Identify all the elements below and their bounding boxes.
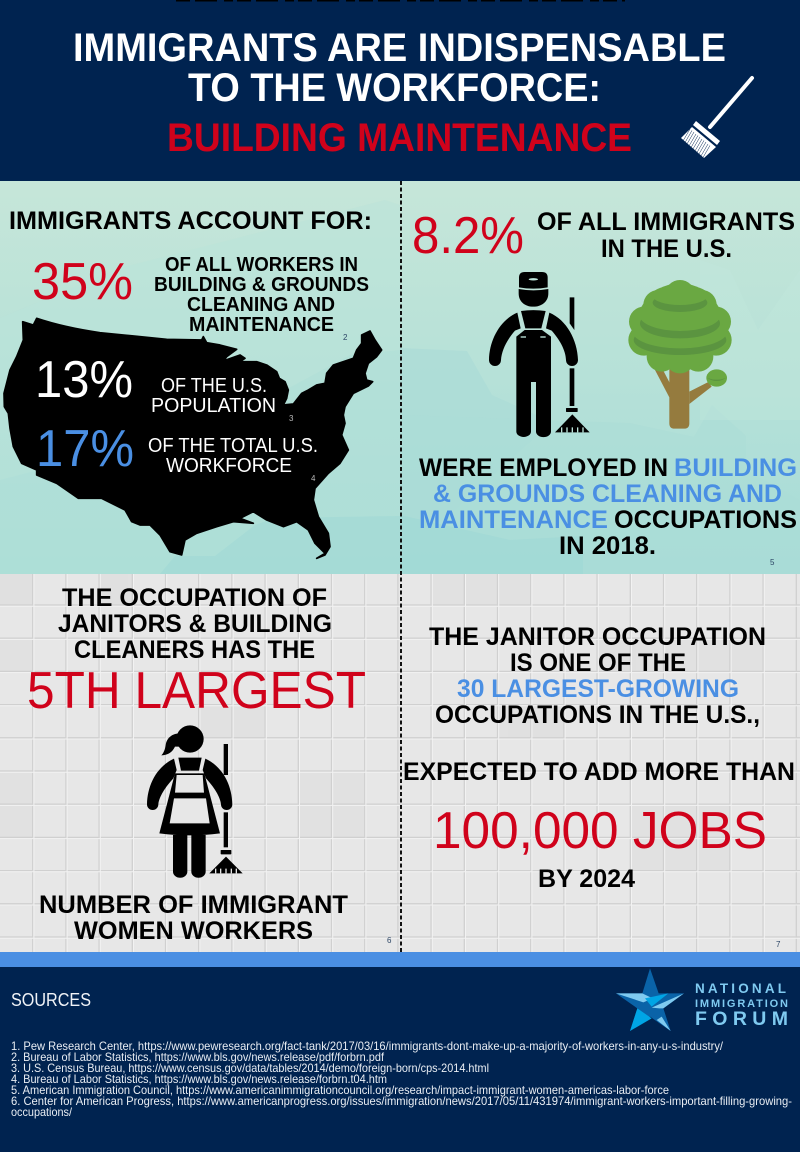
title: immigrants are indispensable	[73, 26, 726, 110]
stat: 35 percent: BUILDING & GROUNDS	[154, 273, 369, 296]
heading: sources: SOURCES	[11, 990, 91, 1010]
logo wordmark: FORUM	[695, 1008, 788, 1030]
header panel	[0, 0, 800, 181]
icon: groundskeeper with rake	[489, 272, 590, 437]
source list: 2. Bureau of Labor Statistics, https://www.bls.gov/news.release/pdf/forbrn.pdf	[11, 1050, 385, 1064]
stat: 17 percent	[36, 420, 318, 483]
source list: 4. Bureau of Labor Statistics, https://www.bls.gov/news.release/forbrn.t04.htm	[11, 1072, 387, 1086]
text: employed in building occupations: 5	[770, 558, 775, 567]
stat: 13 percent	[35, 351, 294, 423]
stat: 35 percent: 2	[343, 333, 348, 342]
source list	[11, 1039, 792, 1119]
stat: 13 percent: 13%	[35, 351, 133, 409]
panel: 8.2 percent of immigrants	[412, 207, 797, 567]
panel: immigrants account for	[4, 207, 382, 558]
text: immigrant women workers: WOMEN WORKERS	[74, 917, 313, 945]
stat: 13 percent: 3	[289, 414, 294, 423]
panel: sources footer	[0, 967, 800, 1152]
footnote 7: 7	[776, 940, 781, 949]
text: employed in building occupations: MAINTENANCE	[419, 506, 608, 534]
stat: 17 percent: WORKFORCE	[166, 454, 292, 477]
logo wordmark: IMMIGRATION	[695, 998, 788, 1010]
text: employed in building occupations: BUILDING	[674, 454, 797, 482]
stat: 35 percent: MAINTENANCE	[189, 313, 334, 336]
source list: 1. Pew Research Center, https://www.pewresearch.org/fact-tank/2017/03/16/immigrants-dont-make-up-a-majority-of-workers-in-any-u-s-industry/	[11, 1039, 724, 1053]
panel: 5th largest	[27, 584, 392, 945]
text: of all immigrants: OF ALL IMMIGRANTS	[537, 208, 795, 236]
text: occupation of janitors: CLEANERS HAS THE	[74, 636, 315, 664]
stat: 17 percent: 4	[311, 474, 316, 483]
dashed divider	[400, 181, 402, 952]
map of the United States	[4, 318, 382, 558]
text: occupation of janitors: JANITORS & BUILDING	[58, 610, 332, 638]
stat: 13 percent: OF THE U.S.	[161, 374, 267, 397]
logo wordmark	[695, 981, 788, 1030]
blue band	[0, 952, 800, 967]
source list: occupations/	[11, 1105, 73, 1119]
logo star	[616, 968, 684, 1031]
stat: 100,000 jobs: 100,000 JOBS	[433, 802, 767, 860]
stat: 5th largest: 5TH LARGEST	[27, 662, 366, 720]
stat: 35 percent: OF ALL WORKERS IN	[165, 253, 358, 276]
source list: 3. U.S. Census Bureau, https://www.census.gov/data/tables/2014/demo/foreign-born/cps-2014.html	[11, 1061, 489, 1075]
heading: IMMIGRANTS ACCOUNT FOR:	[9, 207, 372, 235]
text: employed in building occupations: IN 2018.	[559, 532, 656, 560]
text: employed in building occupations: & GROUNDS CLEANING AND	[433, 480, 782, 508]
stat: 17 percent: 17%	[36, 420, 134, 478]
panel: tile backdrop	[0, 574, 800, 952]
stat: 35 percent	[32, 253, 369, 342]
text: employed in building occupations: OCCUPATIONS	[614, 506, 797, 534]
text: of all immigrants	[537, 208, 795, 263]
logo: National Immigration Forum	[616, 968, 788, 1031]
stat: 8.2 percent: 8.2%	[412, 207, 524, 265]
stat: 17 percent: OF THE TOTAL U.S.	[148, 434, 318, 457]
title: immigrants are indispensable: TO THE WORKFORCE:	[188, 66, 601, 110]
stat: 13 percent: POPULATION	[151, 394, 276, 417]
text: janitor occupation: OCCUPATIONS IN THE U.S.,	[435, 701, 760, 729]
icon: tree	[628, 280, 732, 429]
text: janitor occupation: 30 LARGEST-GROWING	[457, 675, 739, 703]
logo wordmark: NATIONAL	[695, 981, 786, 996]
text: janitor occupation: THE JANITOR OCCUPATION	[429, 623, 766, 651]
text: janitor occupation: EXPECTED TO ADD MORE THAN	[403, 758, 795, 786]
source list: 5. American Immigration Council, https://www.americanimmigrationcouncil.org/research/impact-immigrant-women-americas-labor-force	[11, 1083, 669, 1097]
subtitle: building maintenance: BUILDING MAINTENANCE	[167, 116, 632, 160]
text: immigrant women workers: NUMBER OF IMMIGRANT	[39, 891, 348, 919]
text: employed in building occupations: WERE EMPLOYED IN	[419, 454, 668, 482]
text: janitor occupation: IS ONE OF THE	[510, 649, 686, 677]
stat: 35 percent: CLEANING AND	[187, 293, 335, 316]
panel: immigrant share backdrop	[0, 181, 800, 574]
text: immigrant women workers	[39, 891, 392, 945]
icon: broom	[681, 78, 752, 158]
icon: woman cleaner with broom	[147, 725, 243, 878]
title: immigrants are indispensable: IMMIGRANTS ARE INDISPENSABLE	[73, 26, 726, 70]
stat: 35 percent: 35%	[32, 253, 133, 311]
text: immigrant women workers: 6	[387, 936, 392, 945]
text: occupation of janitors: THE OCCUPATION OF	[62, 584, 327, 612]
text: by 2024: BY 2024	[538, 865, 635, 893]
panel: 100,000 jobs	[403, 623, 795, 949]
text: janitor occupation	[403, 623, 795, 786]
text: employed in building occupations	[419, 454, 797, 567]
text: of all immigrants: IN THE U.S.	[601, 235, 732, 263]
text: occupation of janitors	[58, 584, 332, 664]
